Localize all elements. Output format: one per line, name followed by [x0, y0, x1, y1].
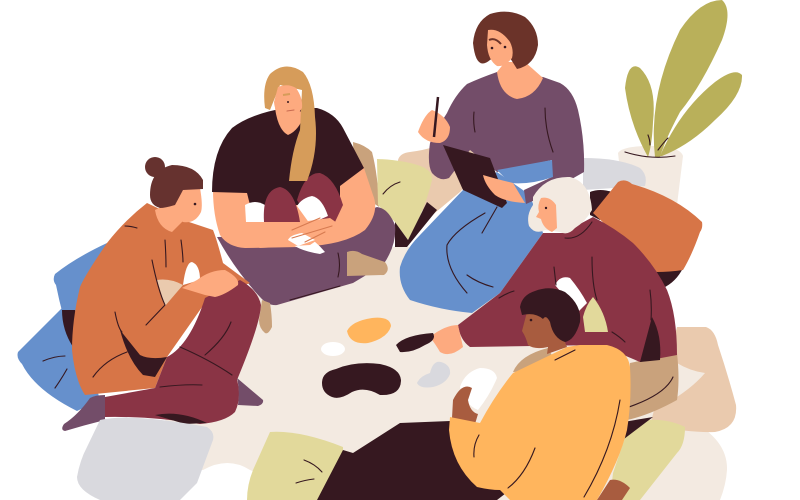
hair: [473, 12, 538, 69]
skirt: [400, 172, 543, 313]
jacket: [449, 345, 631, 500]
hand: [452, 386, 478, 424]
face: [170, 188, 202, 222]
neck: [275, 108, 305, 135]
rug: [150, 245, 727, 500]
hair: [520, 288, 580, 342]
hand: [430, 325, 463, 354]
blue pillows left: [18, 243, 107, 411]
face: [487, 30, 513, 66]
chest gap: [157, 280, 183, 306]
socks: [62, 378, 263, 431]
white sock and olive cushion: [555, 277, 587, 312]
front pillows: [77, 417, 685, 500]
shirt: [212, 108, 364, 205]
hand: [483, 175, 525, 203]
person: woman in orange hoodie: [62, 157, 263, 431]
olive pillow left: [247, 432, 343, 500]
neck and face: [522, 312, 567, 354]
back pillows centre: [353, 142, 480, 247]
olive pillow right: [610, 420, 685, 500]
sweater: [429, 72, 584, 204]
hoodie: [72, 203, 250, 395]
person: woman with blonde hair: [212, 66, 395, 333]
hand with pen: [418, 110, 450, 143]
trousers: [217, 207, 395, 305]
hand: [597, 480, 630, 500]
socks: [259, 251, 388, 333]
hand on knee: [182, 270, 238, 297]
tan trousers: [513, 348, 678, 420]
dark trousers: [317, 421, 510, 500]
person: woman with tablet: [400, 12, 584, 313]
white blob: [460, 368, 497, 410]
jumper: [458, 217, 677, 362]
tablet: [443, 145, 507, 208]
hair: [264, 66, 316, 181]
mask: [396, 333, 434, 352]
face: [274, 85, 302, 118]
maroon trousers: [105, 280, 261, 424]
white hair: [528, 177, 592, 233]
person: man in yellow: [317, 288, 631, 500]
hair: [150, 165, 203, 208]
potted plant: [618, 0, 742, 205]
neck: [155, 200, 184, 232]
neck: [497, 62, 543, 99]
arms: [213, 165, 375, 248]
back pillows right: [583, 158, 702, 288]
peach cushion right: [650, 327, 736, 432]
grey pillow: [77, 418, 213, 500]
rug blobs: [321, 318, 450, 398]
face: [536, 198, 557, 232]
bun: [145, 157, 165, 177]
hands: [292, 218, 332, 242]
person: older woman in maroon: [396, 177, 678, 420]
forearm lower: [240, 218, 340, 248]
knees and feet: [245, 202, 265, 222]
